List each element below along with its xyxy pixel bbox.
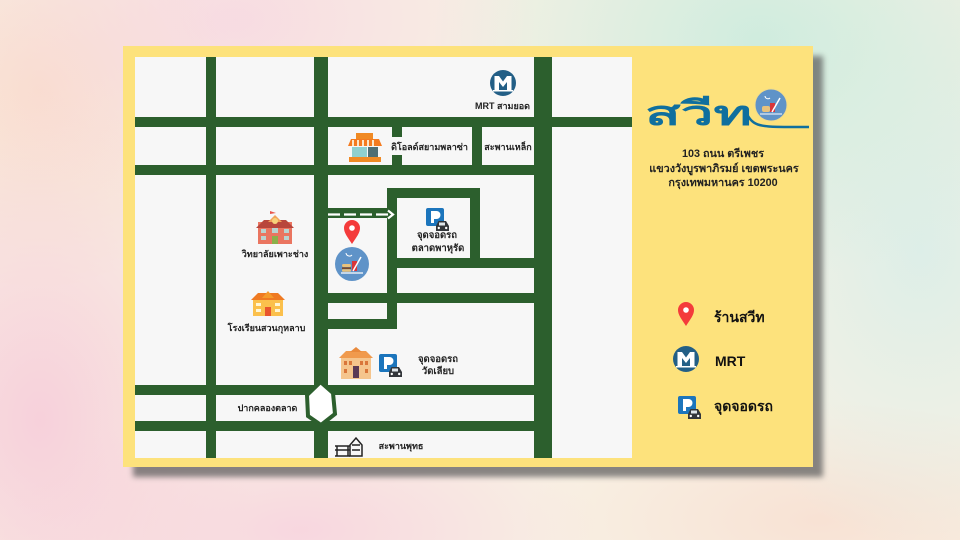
- label: Memorial Bridge: สะพานพุทธ: [379, 441, 423, 452]
- label: Phahurat market parking: จุดจอดรถ: [417, 230, 457, 241]
- roundabout: [307, 382, 335, 425]
- label: Wat Liap parking: จุดจอดรถ: [418, 354, 458, 365]
- icon: memorial bridge: [335, 438, 362, 456]
- roads: [135, 57, 632, 458]
- label: Phahurat market parking: [412, 230, 464, 254]
- address: แขวงวังบูรพาภิรมย์ เขตพระนคร: [649, 162, 799, 176]
- label: diode siam plaza: ดิโอลด์สยามพลาซ่า: [391, 141, 468, 152]
- icon: Suan Kularb school: [251, 291, 285, 316]
- label: diode siam plaza: [391, 137, 468, 155]
- label: Wat Liap parking: วัดเลียบ: [422, 365, 454, 377]
- dashed arrow: [328, 210, 393, 218]
- icon: shop: [348, 133, 382, 162]
- logo: Sweet wordmark: สวีท: [645, 95, 752, 133]
- icon: technical college: [256, 211, 294, 244]
- label: Suan Kularb school: โรงเรียนสวนกุหลาบ: [227, 322, 306, 334]
- address: [649, 147, 799, 190]
- label: steel bridge: สะพานเหล็ก: [484, 140, 532, 152]
- label: technical college: วิทยาลัยเพาะช่าง: [241, 249, 308, 259]
- icon: sweet shop logo: [335, 247, 369, 281]
- card shadow: [133, 56, 823, 477]
- legend: parking: จุดจอดรถ: [714, 398, 773, 415]
- legend: shop: ร้านสวีท: [714, 309, 765, 325]
- label: Phahurat market parking: ตลาดพาหุรัด: [412, 243, 464, 254]
- icon: parking at Wat Liap: [379, 354, 402, 377]
- label: MRT สามยอด: MRT สามยอด: [475, 101, 530, 111]
- label: Wat Liap parking: [418, 354, 458, 377]
- icon: parking at Phahurat market: [426, 208, 449, 231]
- icon: shop location pin: [344, 220, 360, 244]
- label: Pak Khlong Talat: ปากคลองตลาด: [238, 403, 298, 413]
- legend: MRT: MRT: [715, 353, 746, 369]
- address: กรุงเทพมหานคร 10200: [668, 177, 778, 190]
- address: 103 ถนน ตรีเพชร: [682, 147, 764, 160]
- panel: yellow card: [123, 46, 813, 467]
- logo: Sweet wordmark: [645, 89, 809, 133]
- legend: [673, 302, 773, 419]
- icon: Wat Liap temple: [339, 347, 373, 379]
- panel: map base: [135, 57, 632, 458]
- label: MRT สามยอด: [475, 70, 530, 111]
